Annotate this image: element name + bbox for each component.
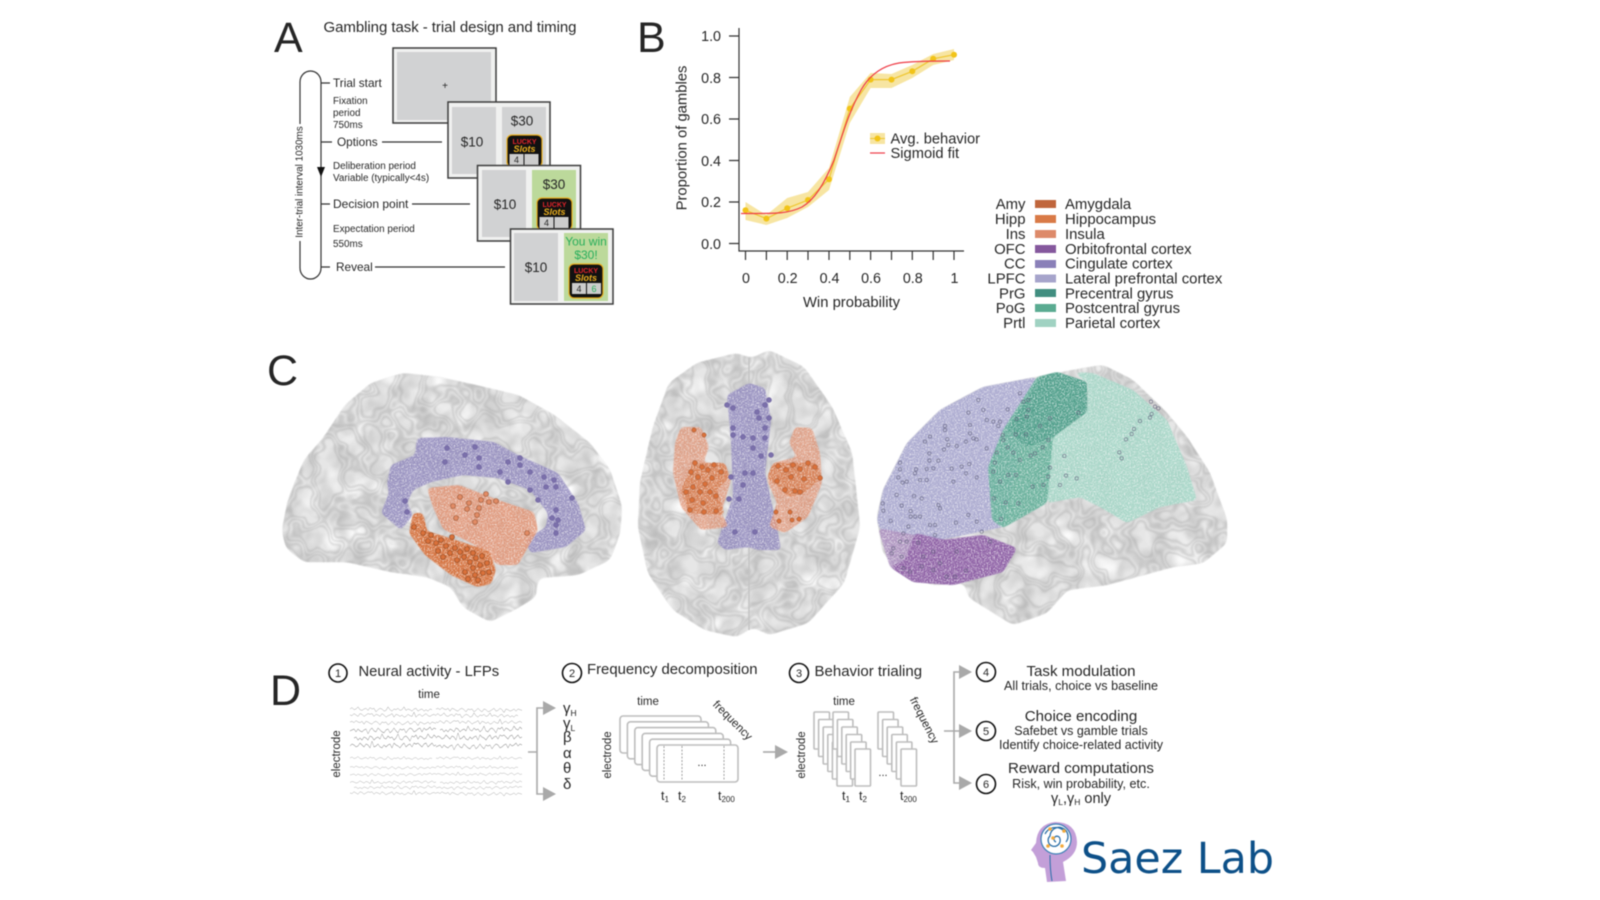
frequency band labels: γ [563,715,570,732]
right hippocampus region [767,463,822,497]
step 3: behavior trialing: frequency [907,695,941,746]
logo wordmark: Saez Lab [1081,835,1274,884]
insula region [427,485,538,565]
step 6: reward computations: Risk, win probability, etc. [1012,777,1150,791]
step 4: task modulation: All trials, choice vs baseline [1004,679,1158,693]
screen 2: options: 4 [514,155,519,165]
timeline stages and periods: Deliberation period [333,161,416,172]
screen 3: decision point: 4 [544,218,549,228]
cingulate electrodes [402,444,574,536]
timeline stages and periods: 550ms [333,239,363,250]
step 6: reward computations: γ [1051,791,1058,807]
postcentral region [988,372,1087,528]
region color legend [987,197,1223,332]
screen 2: options: LUCKY [512,139,537,146]
frequency band labels [563,700,577,793]
orange electrodes [684,428,822,523]
brain view: medial [282,373,622,622]
chart axes and tick labels: 0.6 [701,112,721,128]
frequency band labels: γ [563,700,570,717]
step 3: behavior trialing: time [833,696,855,708]
screen 3: decision point: LUCKY [542,202,567,209]
screen 3: decision point: Slots [543,207,566,217]
step 2: frequency decomposition: frequency [710,699,754,743]
trial stacks: ... [878,767,888,779]
step 3: behavior trialing: Behavior trialing [814,663,922,680]
arrow from step 2 to step 3 [763,745,788,759]
chart axes and tick labels: 1 [951,271,959,287]
chart axes and tick labels: 0.2 [778,271,798,287]
chart legend: Sigmoid fit [890,146,959,162]
time bin labels: t [900,789,903,803]
step 4: task modulation [976,662,1158,693]
chart axes and tick labels: 0 [742,271,750,287]
time-frequency stack [620,716,738,782]
region color legend: Precentral gyrus [1065,286,1173,302]
panel C: brain views [267,347,1227,637]
region color legend: OFC [994,242,1026,258]
timeline stages and periods: Decision point [333,197,409,211]
cingulate electrodes [724,398,774,534]
frequency band labels: L [570,723,576,733]
step 6: reward computations: ,γ [1063,791,1075,807]
step 1: neural activity: 1 [335,668,341,680]
region color legend: Postcentral gyrus [1065,301,1180,317]
time bin labels: 1 [664,795,669,804]
region color legend: PrG [999,286,1026,302]
timeline stages and periods: Fixation [333,96,368,107]
time bin labels: t [718,789,721,803]
region color legend: Prtl [1003,316,1026,332]
chart axes and tick labels: 0.4 [820,271,839,287]
screen 4: reveal: 4 [576,284,582,294]
screen 4: reveal: $10 [525,260,547,275]
screen 4: reveal: 6 [591,284,597,294]
time bin labels: 1 [845,795,850,804]
orbitofrontal region [878,528,1017,585]
step 5: choice encoding: Safebet vs gamble trials [1014,724,1148,738]
timeline loop with arrow [300,71,325,279]
chart axes and tick labels: 0.8 [903,271,923,287]
time bin labels: 200 [903,795,917,804]
step 1: neural activity: electrode [331,730,343,778]
timeline stages and periods: Options [337,135,378,149]
inter-trial interval label: Inter-trial interval 1030ms [294,126,306,238]
timeline stages and periods: Variable (typically<4s) [333,173,429,184]
step 1: neural activity: Neural activity - LFPs [358,664,499,680]
chart axes and tick labels: 0.8 [701,71,721,87]
frequency band labels: δ [563,776,571,793]
timeline stages and periods: Expectation period [333,224,415,235]
screen 2: options: $10 [461,134,483,150]
region color legend: Insula [1065,227,1105,243]
step 5: choice encoding [976,708,1164,752]
timeline stages and periods: Reveal [336,260,373,274]
frequency band labels: β [563,729,572,746]
time bin labels: t [859,789,862,803]
step 2: frequency decomposition: electrode [602,731,614,779]
screen 2: options: $30 [511,114,533,128]
insula electrodes [450,492,530,536]
step 6: reward computations [976,760,1154,807]
chart axes and tick labels [701,28,964,287]
step 6: reward computations: L [1058,797,1063,807]
icon: head with brain [1031,822,1077,882]
panel letter A: A [274,14,303,62]
step 5: choice encoding: Choice encoding [1025,708,1137,725]
screen 2: options [448,102,550,178]
step 6: reward computations: H [1074,797,1080,807]
cingulate region [717,383,781,550]
region color legend: CC [1004,256,1026,272]
step 1: neural activity: time [418,689,440,701]
step 3: behavior trialing: electrode [796,731,808,779]
step 3: behavior trialing [790,663,941,804]
time bin labels: t [661,789,664,803]
orbitofrontal darker core [890,533,1017,585]
region color legend: Lateral prefrontal cortex [1065,272,1223,288]
hippocampus electrodes [412,524,492,582]
screen 3: decision point [478,166,580,241]
sigmoid fit curve [741,61,950,214]
region color legend: Orbitofrontal cortex [1065,242,1192,258]
screen 4: reveal [510,229,613,304]
chart axes and tick labels: 0.6 [861,271,881,287]
screen 4: reveal: Slots [575,273,597,283]
step 4: task modulation: Task modulation [1026,663,1136,680]
average behavior line and points [742,52,957,222]
x axis title: Win probability [803,295,901,311]
region color legend: Amygdala [1065,197,1132,213]
branching arrows to outputs [944,665,972,790]
time bin labels: 2 [681,795,686,804]
time bin labels: 200 [721,795,735,804]
screen 1: fixation: + [442,81,448,92]
right insula region [767,427,822,533]
time bin labels [661,789,735,804]
step 2: frequency decomposition: Frequency decomposition [587,662,758,678]
region color legend: Cingulate cortex [1065,256,1173,272]
timeline stages and periods: 750ms [333,120,363,131]
region color legend: LPFC [987,272,1026,288]
confidence band [746,49,954,225]
region color legend: Amy [996,197,1026,213]
region color legend: PoG [996,301,1026,317]
step 6: reward computations: only [1080,791,1112,807]
time bin labels [842,789,917,804]
panel letter B: B [637,14,666,62]
frequency band labels: H [570,708,577,718]
brain view: top [638,350,860,637]
screen 4: reveal: $30! [574,248,598,262]
step 2: frequency decomposition: 2 [569,668,575,680]
precentral darker region [1007,372,1087,447]
panel A title: Gambling task - trial design and timing [324,19,576,36]
step 3: behavior trialing: 3 [796,668,802,680]
region color legend: Parietal cortex [1065,316,1161,332]
timeline stages and periods [321,76,505,274]
screen 2: options: Slots [513,144,536,154]
step 2: frequency decomposition [562,662,758,804]
panel D: analysis pipeline [270,662,1164,807]
panel A: trial design and timing [274,14,613,304]
arrows to frequency bands [528,701,556,801]
screen 4: reveal: LUCKY [574,268,598,275]
time bin labels: t [678,789,681,803]
timeline stages and periods: period [333,108,360,119]
time bin labels: 2 [862,795,867,804]
parietal region [1047,372,1197,523]
frequency band labels: α [563,745,572,762]
panel letter D: D [270,667,301,715]
time bin labels: t [842,789,845,803]
step 1: neural activity [329,664,522,796]
brain view: lateral [877,365,1227,625]
chart axes and tick labels: 0.4 [701,154,721,170]
panel B: behavior chart [637,14,980,311]
chart axes and tick labels: 0.2 [701,195,721,211]
cingulate region [381,437,586,553]
y axis title: Proportion of gambles [674,66,690,210]
step 4: task modulation: 4 [983,667,989,679]
screen 3: decision point: $30 [543,177,565,192]
screen 4: reveal: You win [565,234,607,248]
screen 1: fixation [393,48,496,123]
step 2: frequency decomposition: time [637,696,659,708]
chart legend: Avg. behavior [890,132,980,148]
left hippocampus region [681,463,729,515]
panel letter C: C [267,347,298,395]
time-frequency stack: ... [697,757,707,769]
Saez Lab logo [1031,822,1274,884]
lateral prefrontal region [877,377,1037,540]
region color legend: Hipp [995,212,1026,228]
trial stacks [814,712,916,786]
midline fissure [748,358,750,630]
chart legend [870,132,980,162]
step 6: reward computations: Reward computations [1008,760,1154,777]
step 6: reward computations: 6 [983,779,989,791]
hippocampus region [409,513,496,587]
timeline stages and periods: Trial start [333,76,382,90]
hollow electrodes [881,392,1160,578]
step 5: choice encoding: Identify choice-related activity [999,738,1164,752]
chart axes and tick labels: 1.0 [701,29,721,45]
left insula region [673,427,731,530]
region color legend: Ins [1006,227,1026,243]
chart axes and tick labels: 0.0 [701,237,721,253]
screen 3: decision point: $10 [494,197,516,212]
frequency band labels: θ [563,760,571,777]
step 5: choice encoding: 5 [983,726,989,738]
LFP traces [350,707,522,796]
region color legend: Hippocampus [1065,212,1156,228]
